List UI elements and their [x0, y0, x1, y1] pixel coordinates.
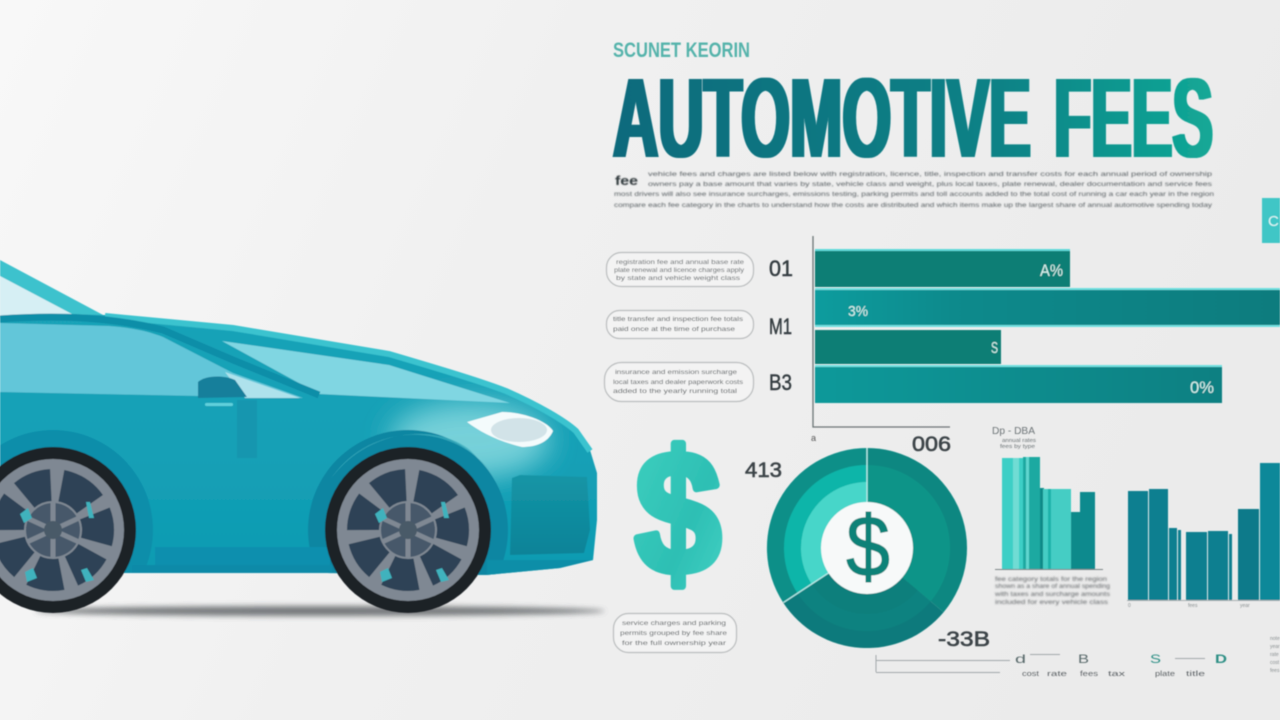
title: [613, 55, 1213, 181]
edge note: rate: [1270, 652, 1279, 658]
hood highlight edge: [105, 316, 590, 451]
bar 2: [815, 288, 1280, 327]
timeline labels top: d: [1015, 652, 1026, 666]
bar 1: A%: [1040, 261, 1063, 280]
chart B baseline: [1127, 600, 1280, 602]
timeline labels top: B: [1078, 652, 1089, 666]
car body: [0, 314, 597, 575]
column chart B: [1127, 463, 1280, 609]
horizontal bar chart: [811, 236, 1280, 443]
chart A bars: [1002, 457, 1095, 569]
front wheel: [325, 447, 491, 613]
edge note: [1270, 636, 1280, 674]
axis tick label: a: [811, 433, 816, 443]
row labels: [769, 256, 793, 395]
donut sector: left: [767, 448, 867, 602]
chart A caption: fee category totals for the region: [995, 577, 1107, 583]
intro paragraph: [614, 172, 1214, 209]
timeline axis: [876, 654, 1205, 672]
pill note 2: [606, 310, 754, 338]
chart A caption: shown as a share of annual spending: [995, 584, 1110, 590]
chart A baseline: [995, 568, 1103, 570]
row label 1: 01: [769, 256, 793, 281]
chart B axis labels: fees: [1188, 603, 1198, 609]
side mirror: [198, 376, 247, 398]
donut chart: [767, 448, 967, 648]
chart A heading: Dp - DBA: [992, 426, 1035, 437]
side tab: C: [1268, 213, 1279, 230]
value top: 006: [912, 433, 951, 456]
timeline labels bottom: plate: [1155, 671, 1175, 678]
chart A caption: with taxes and surcharge amounts: [994, 592, 1110, 598]
chart B axis labels: 0: [1128, 603, 1131, 609]
chart A heading: annual rates: [1002, 438, 1037, 444]
pill note 4: permits grouped by fee share: [620, 631, 728, 637]
roof pillar and rear glass: [0, 260, 105, 318]
edge note: fees: [1270, 668, 1280, 674]
pill note 1: plate renewal and licence charges apply: [614, 268, 744, 274]
pill note 2: paid once at the time of purchase: [613, 327, 736, 333]
chart B axis labels: [1128, 603, 1250, 609]
chart B axis labels: year: [1240, 603, 1250, 609]
pill notes: [604, 252, 754, 652]
icon: large dollar sign: $: [635, 415, 721, 610]
bar 2: 3%: [848, 303, 868, 320]
paragraph line 4: compare each fee category in the charts to understand how the costs are distributed and which items make up the largest share of annual automotive spending today: [614, 203, 1212, 209]
timeline labels bottom: rate: [1047, 671, 1067, 678]
chart A caption: [994, 577, 1110, 606]
edge note: year: [1270, 644, 1280, 650]
side window: [0, 323, 303, 398]
pill note 4: service charges and parking: [622, 621, 726, 627]
car illustration: [0, 260, 605, 630]
body shading: [0, 384, 593, 576]
timeline labels bottom: cost: [1022, 671, 1039, 678]
chart A heading: [992, 426, 1037, 450]
row label 2: M1: [769, 314, 792, 339]
donut sector: right: [867, 448, 967, 612]
chart B bars: [1128, 463, 1280, 600]
pill note 3: insurance and emission surcharge: [615, 370, 738, 376]
rear wheel: [0, 447, 136, 613]
timeline labels bottom: fees: [1080, 671, 1099, 678]
bar 3: S: [991, 340, 998, 357]
bottom timeline: [876, 652, 1227, 678]
paragraph line 1: vehicle fees and charges are listed below with registration, licence, title, inspection and transfer costs for each annual period of ownership: [648, 172, 1213, 178]
pill note 1: registration fee and annual base rate: [616, 260, 745, 266]
pill note 1: by state and vehicle weight class: [616, 276, 740, 282]
icon: centre dollar sign: $: [846, 499, 890, 595]
pill note 4: for the full ownership year: [622, 641, 726, 647]
timeline labels bottom: tax: [1108, 671, 1126, 678]
paragraph marker: fee: [615, 173, 638, 188]
windshield: [222, 341, 510, 403]
row label 3: B3: [769, 370, 792, 395]
donut values: [745, 433, 990, 651]
edge note: cost: [1270, 660, 1280, 666]
value left: 413: [745, 459, 782, 482]
timeline labels bottom: title: [1186, 671, 1205, 678]
value bottom: -33B: [938, 628, 990, 651]
timeline labels top: S: [1150, 652, 1161, 666]
donut centre: [821, 502, 913, 594]
pill note 4: [614, 614, 736, 652]
pill note 3: local taxes and dealer paperwork costs: [613, 380, 743, 386]
bar 3: [815, 330, 1001, 364]
door seam: [237, 400, 257, 458]
edge note: note: [1270, 636, 1280, 642]
paragraph line 3: most drivers will also see insurance surcharges, emissions testing, parking permits and toll accounts added to the total cost of running a car each year in the region: [614, 192, 1214, 198]
chart A heading: fees by type: [1000, 444, 1035, 450]
front grille: [510, 475, 590, 555]
bar 4: 0%: [1190, 378, 1214, 397]
pill note 3: added to the yearly running total: [613, 389, 737, 395]
chart A caption: included for every vehicle class: [995, 600, 1108, 606]
donut sector: bottom: [783, 548, 944, 648]
roof and A-pillar trim: [0, 317, 319, 395]
timeline labels top: D: [1215, 652, 1227, 666]
bar 1: [815, 249, 1070, 287]
column chart A: [992, 426, 1110, 606]
subtitle: SCUNET KEORIN: [613, 39, 750, 62]
headlight: [467, 412, 553, 447]
paragraph line 2: owners pay a base amount that varies by state, vehicle class and weight, plus local taxes, plate renewal, dealer documentation and service fees: [648, 182, 1212, 188]
pill note 1: [606, 252, 754, 286]
timeline labels top: [1015, 652, 1227, 666]
door handle highlight: [205, 403, 233, 406]
pill note 3: [604, 362, 754, 402]
side tab: [1262, 198, 1280, 243]
timeline labels bottom: [1022, 671, 1205, 678]
pill note 2: title transfer and inspection fee totals: [613, 317, 743, 323]
ground shadow: [35, 606, 605, 616]
chart axes: [813, 236, 950, 427]
bar 4: [815, 365, 1222, 403]
